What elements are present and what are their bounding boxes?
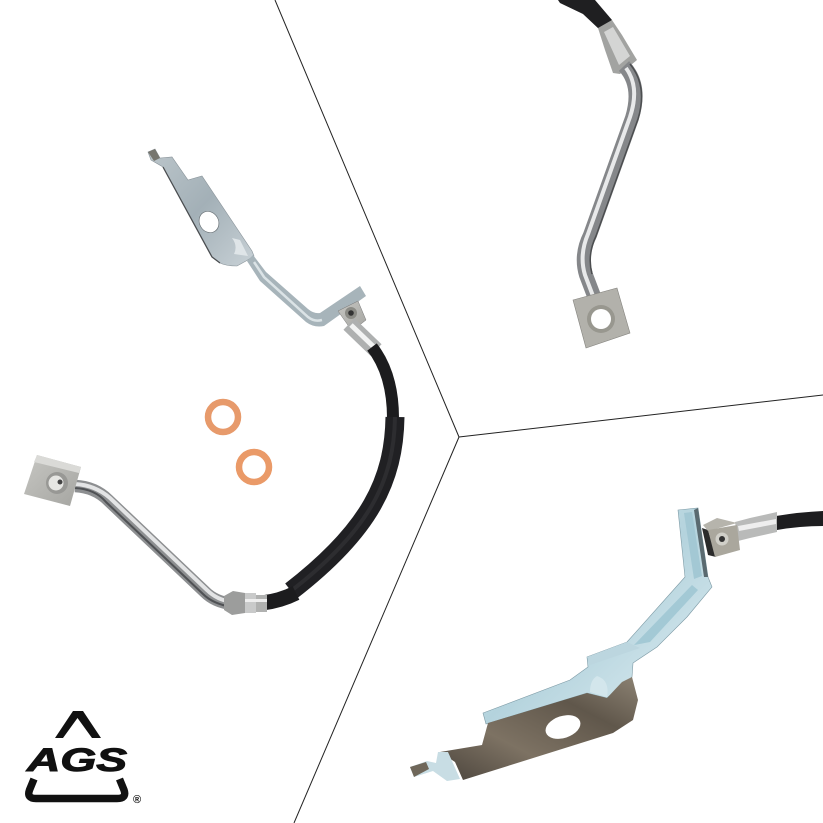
logo top chevron — [55, 711, 101, 738]
top right panel: tube close-up — [558, 0, 642, 348]
steel tube — [75, 484, 232, 607]
steel tube — [583, 64, 642, 296]
crimp ferrule — [735, 512, 777, 541]
left panel: full hose assembly — [24, 149, 395, 615]
registered mark: ® — [133, 794, 141, 806]
square block — [573, 288, 630, 348]
copper washer 2 — [239, 452, 269, 482]
hose end — [558, 0, 612, 30]
fitting block — [702, 518, 740, 557]
lower square block — [24, 455, 81, 506]
lower crimp fitting — [224, 591, 267, 615]
logo wordmark: AGS — [26, 742, 128, 778]
mounting bracket — [148, 149, 366, 326]
black hose — [262, 347, 395, 603]
logo bottom bracket — [29, 779, 125, 798]
divider lines — [275, 0, 823, 823]
bracket tip — [410, 752, 460, 781]
copper washer 1 — [208, 402, 238, 432]
upper fitting — [338, 301, 376, 350]
AGS logo — [26, 711, 141, 806]
hose end — [776, 511, 823, 530]
plate with slot — [440, 676, 638, 780]
bracket arm — [483, 508, 712, 724]
bottom right panel: bracket close-up — [410, 508, 823, 781]
crimp nut — [598, 20, 637, 74]
